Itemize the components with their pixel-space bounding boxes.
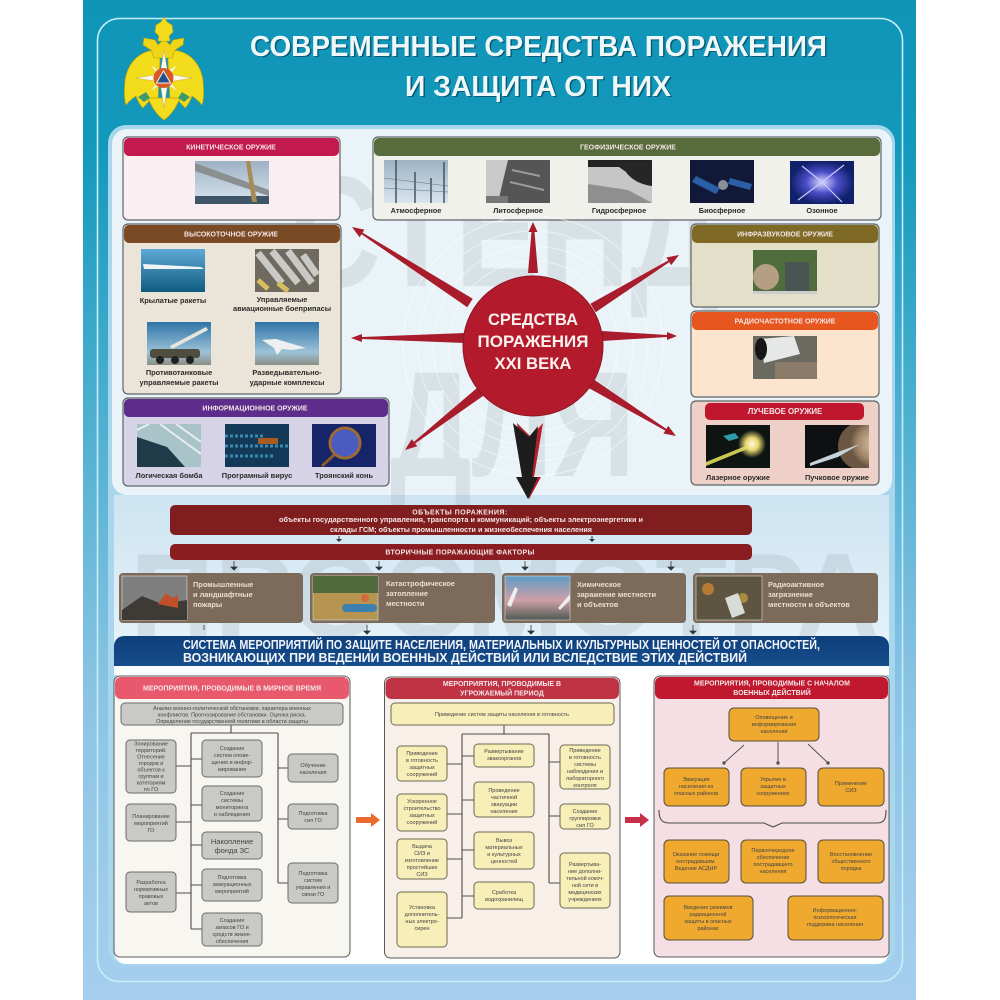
box: zoning: Зонирование [134,742,168,748]
banner: system of protection measures [114,636,889,666]
box: PPE issue: простейших [407,864,438,871]
box: accelerated construction: Ускоренное [407,799,437,805]
banner: objects of destruction: склады ГСМ; объекты промышленности и жизнеобеспечения населения [330,526,592,534]
box: radiation regimes: районах [697,925,719,932]
arrows: to secondary factors [336,536,595,542]
box: regulations: актов [144,901,158,907]
panel: information weapons: ИНФОРМАЦИОННОЕ ОРУЖИЕ [202,406,308,412]
photo: reconnaissance strike complex [255,322,319,365]
arrows: to protection system [204,625,696,634]
card: radioactive contamination: местности и объектов [768,600,850,609]
photo: logic bomb [137,424,201,467]
box: planning [126,804,176,841]
box: evacuation bodies [474,744,534,767]
box: medical network: ние дополни- [568,869,602,875]
box: medical network: учреждениях [568,897,602,903]
box: partial evacuation: частичной [491,794,517,801]
box: medical network [560,853,610,908]
watermark text: ДЛЯ [390,340,635,508]
panel: radio-frequency weapons [691,311,879,397]
box: rescue: Ведение АСДНР [675,866,717,872]
photo: biospheric [690,160,754,203]
captions [136,471,373,480]
banner: objects of destruction: объекты государственного управления, транспорта и коммуникаций; объекты электроэнергетики и [279,516,643,524]
box: public order: Восстановление [830,852,872,858]
box: lab control: контроля [573,783,597,789]
photo: chemical plumes [505,576,570,620]
title: И ЗАЩИТА ОТ НИХ [406,72,673,104]
box: zoning: городов и [139,761,163,767]
box: accelerated construction: сооружений [407,819,437,826]
card: radioactive contamination [693,573,878,623]
panel: kinetic weapons: КИНЕТИЧЕСКОЕ ОРУЖИЕ [186,144,276,152]
photo: hydrospheric [588,160,652,203]
box: removal of valuables: и культурных [487,852,521,858]
card: fires [119,573,303,623]
box: zoning: территорий. [136,747,167,754]
inner panel [108,125,895,965]
box: radiation regimes: Введение режимов [683,905,733,911]
brace [659,810,886,827]
box: PPE issue: СИЗ и [414,851,430,857]
banner: system of protection measures: ВОЗНИКАЮЩИХ ПРИ ВЕДЕНИИ ВОЕННЫХ ДЕЙСТВИЙ ИЛИ ВСЛЕДСТВИЕ ЭТИХ ДЕЙСТВИЙ [183,650,747,665]
watermark text: ПРОСМОТРА [130,528,880,664]
box: shelter fund: фонда ЗС [215,846,250,855]
box: accelerated construction [397,794,447,831]
panel: geophysical weapons [373,137,881,220]
captions: Атмосферное [391,206,441,215]
captions: Биосферное [699,206,745,215]
box: readiness: Приведение систем защиты населения в готовность [435,712,569,718]
box: control systems: управления и [296,885,330,891]
panel: threat-period measures [384,677,620,958]
box: medical network: ной сети в [572,882,598,889]
photo: trojan horse [312,424,376,467]
box: analysis: Анализ военно-политической обстановки, характера военных [153,705,311,712]
card: chemical contamination: Химическое [577,580,621,589]
card: fires: и ландшафтные [193,590,253,599]
box: regulations: нормативных [134,887,168,893]
box: evacuation: мероприятий [215,888,249,895]
box: additional power: ных электро- [405,919,439,925]
box: psychological support: психологическая [813,915,857,921]
title: СОВРЕМЕННЫЕ СРЕДСТВА ПОРАЖЕНИЯ [250,31,827,63]
captions [391,206,838,215]
box: monitoring [202,786,262,821]
box: primary support: обеспечение [757,855,789,861]
box: shelter: защитных [760,784,786,790]
captions: Разведывательно- [252,368,322,377]
concentric rings [403,216,663,476]
box: warning systems [202,740,262,777]
box: unit alert [474,882,534,909]
card: radioactive contamination: загрязнение [768,590,813,599]
box: evacuation [664,768,729,806]
arrow: peacetime to threat period [356,813,380,827]
banner: objects of destruction [170,505,752,535]
box: evacuation bodies: Развертывание [484,749,524,755]
box: additional power: сирен [415,926,429,932]
connector lines [176,725,288,929]
box: zoning: по ГО [144,787,159,793]
captions: ударные комплексы [250,378,324,387]
box: unit alert: Сработка [492,890,517,896]
box: planning: Планирование [132,814,170,820]
box: alerting: населения [760,729,788,735]
box: regulations: Разработка [136,880,167,886]
box: medical network: медицинских [568,890,602,896]
panel: threat-period measures: УГРОЖАЕМЫЙ ПЕРИОД [460,688,544,698]
box: training: Обучение [300,763,326,769]
photo: dosimeter and mushrooms [696,576,762,620]
box: radiation regimes: радиационной [690,911,726,918]
captions: Логическая бомба [136,471,203,480]
box: monitoring: и наблюдения [214,812,250,818]
panel: infrasound weapons [691,224,879,307]
box: evacuation: эвакуационных [212,882,252,888]
box: zoning: Отнесение [137,754,165,760]
photo: lithospheric [486,160,550,203]
panel: infrasound weapons: ИНФРАЗВУКОВОЕ ОРУЖИЕ [737,232,833,238]
box: lab control: наблюдения и [567,769,603,775]
box: additional power [397,892,447,947]
box: PPE issue: изготовление [405,858,439,864]
box: evacuation: Эвакуация [682,777,710,783]
box: psychological support: Информационно- [813,908,858,914]
captions: Гидросферное [592,206,646,215]
box: accelerated construction: защитных [409,813,435,819]
box: shelters readiness: защитных [409,765,435,771]
photo: software virus [225,424,289,467]
box: zones: Подготовка [299,811,328,817]
captions: Литосферное [493,206,543,215]
box: evacuation: населения из [679,784,714,790]
box: warning systems: систем опове- [214,753,250,759]
card: chemical contamination [502,573,686,623]
box: partial evacuation: населения [490,809,518,815]
photo: guided munitions [255,249,319,292]
box: zoning: объектов к [137,768,165,774]
panel: radio-frequency weapons: РАДИОЧАСТОТНОЕ ОРУЖИЕ [735,318,836,326]
box: evacuation: опасных районов [674,790,718,797]
box: alerting [729,708,819,741]
card: fires: Промышленные [193,580,253,589]
photo: radio-frequency emitter [753,336,817,379]
panel: peacetime measures: МЕРОПРИЯТИЯ, ПРОВОДИМЫЕ В МИРНОЕ ВРЕМЯ [143,686,321,692]
photo: atmospheric [384,160,448,203]
panel: beam weapons [691,401,886,485]
box: unit alert: водохранилищ [485,897,523,903]
box: evacuation bodies: эвакоорганов [487,756,521,762]
box: force grouping [560,804,610,829]
title [250,31,828,104]
box: lab control: системы [574,762,596,768]
box: removal of valuables [474,832,534,869]
card: flooding: местности [386,599,425,608]
photo: infrasound emitter [753,250,817,294]
captions: Противотанковые [146,368,212,377]
panel: high-precision weapons [123,224,341,394]
box: alerting: Оповещение и [755,715,793,721]
box: lab control: Приведение [569,748,601,754]
photo: ozone [790,161,854,204]
box: PPE issue [397,839,447,879]
box: shelter: сооружениях [756,791,790,797]
box: zoning: категориям [137,780,166,786]
box: force grouping: Создание [573,809,597,815]
card: flooding: Катастрофическое [386,579,455,588]
box: shelter: Укрытие в [760,777,786,783]
central circle: XXI ВЕКА [494,354,572,373]
box: removal of valuables: Вывоз [496,838,512,844]
box: monitoring: системы [221,798,243,804]
photo: particle-beam weapon [805,425,869,468]
captions: Управляемые [257,295,307,304]
box: regulations [126,872,176,912]
box: primary support: Первоочередное [751,848,795,854]
panel: kinetic weapons [123,137,340,220]
captions: управляемые ракеты [140,378,218,387]
banner: objects of destruction: ОБЪЕКТЫ ПОРАЖЕНИЯ: [412,510,508,516]
box: removal of valuables: ценностей [491,858,517,865]
panel: wartime measures: ВОЕННЫХ ДЕЙСТВИЙ [733,688,811,697]
card: flooding: затопление [386,589,428,598]
connector lines [447,725,560,918]
box: reserves [202,913,262,946]
title: И ЗАЩИТА ОТ НИХ [405,71,672,103]
panel: wartime measures: МЕРОПРИЯТИЯ, ПРОВОДИМЫЕ С НАЧАЛОМ [694,680,850,688]
box: additional power: Установка [409,905,436,911]
card: radioactive contamination: Радиоактивное [768,580,824,589]
banner: secondary factors [170,544,752,560]
outer frame line [98,18,902,982]
box: warning systems: мирования [218,767,246,773]
box: control systems: связи ГО [302,892,325,898]
box: planning: ГО [148,828,155,834]
panel: high-precision weapons: ВЫСОКОТОЧНОЕ ОРУЖИЕ [184,232,278,238]
box: psychological support: поддержка населения [807,922,863,928]
panel: peacetime measures [114,676,350,957]
box: shelter fund [202,832,262,859]
box: rescue: пострадавшим. [676,859,716,865]
card: flooding [310,573,495,623]
captions: Троянский конь [315,471,373,480]
central circle: СРЕДСТВА [488,310,578,329]
captions [706,473,869,482]
captions: Програмный вирус [222,471,292,480]
captions: Озонное [806,206,838,215]
captions: авиационные боеприпасы [233,304,331,313]
box: shelters readiness: сооружений [407,771,437,778]
arrows: alerting to actions [723,742,829,764]
box: planning: мероприятий [134,820,168,827]
box: alerting: информирование [752,722,796,728]
box: shelter fund: Накопление [211,837,253,846]
photo: flood [313,576,378,620]
box: lab control: в готовность [569,755,601,761]
box: shelters readiness: в готовность [406,758,438,764]
box: evacuation [202,869,262,901]
box: reserves: Создание [220,918,244,924]
box: shelter [741,768,806,806]
box: psychological support [788,896,883,940]
card: chemical contamination: и объектов [577,600,619,609]
box: radiation regimes [664,896,753,940]
box: analysis: Определение государственной политики в области защиты [156,718,308,725]
box: rescue: Оказание помощи [673,852,719,858]
photo: cruise missile [141,249,205,292]
watermark text: СТЕНД [290,144,720,320]
box: primary support [741,840,806,883]
box: control systems: систем [304,878,322,884]
box: zones [288,804,338,829]
box: reserves: обеспечения [216,939,248,945]
box: PPE: Применение [835,781,867,787]
box: force grouping: группировки [569,816,601,822]
box: medical network: Развертыва- [569,862,601,868]
captions [140,295,331,387]
banner: secondary factors: ВТОРИЧНЫЕ ПОРАЖАЮЩИЕ ФАКТОРЫ [385,550,535,556]
box: zoning: группам и [138,774,164,780]
photo: laser weapon [706,425,770,468]
box: rescue [664,840,729,883]
banner: system of protection measures: СИСТЕМА МЕРОПРИЯТИЙ ПО ЗАЩИТЕ НАСЕЛЕНИЯ, МАТЕРИАЛЬНЫХ И КУЛЬТУРНЫХ ЦЕННОСТЕЙ ОТ ОПАСНОСТЕЙ, [183,637,820,652]
box: primary support: пострадавшего [753,862,793,868]
box: reserves: средств жизне- [213,932,252,938]
card: fires: пожары [193,600,222,609]
captions: Крылатые ракеты [140,296,206,305]
box: reserves: запасов ГО и [215,925,249,931]
central circle: ПОРАЖЕНИЯ [478,332,588,351]
photo: fire [122,576,187,620]
arrow: threat period to wartime [625,813,649,827]
box: monitoring: мониторинга [216,805,249,811]
photo: kinetic gun [195,161,269,204]
box: public order: общественного [832,859,870,865]
box: accelerated construction: строительство [403,806,441,812]
photo: anti-tank missiles [147,322,211,365]
box: additional power: дополнитель- [405,912,440,918]
box: partial evacuation: эвакуации [491,802,517,808]
box: warning systems: щения и инфор- [211,760,253,766]
card: chemical contamination: заражение местности [577,590,657,599]
box: lab control [560,745,610,789]
box: zones: сил ГО [304,818,322,824]
box: medical network: тельной кокоч- [566,875,604,882]
box: control systems [288,863,338,903]
box: PPE issue: СИЗ [416,872,428,878]
box: removal of valuables: материальных [485,845,523,851]
box: readiness [391,703,614,725]
box: public order: порядка [841,866,862,872]
panel: beam weapons: ЛУЧЕВОЕ ОРУЖИЕ [748,407,822,416]
box: analysis [121,703,343,725]
box: force grouping: сил ГО [576,823,594,829]
box: lab control: лабораторного [566,776,604,782]
arrow: down to targets [513,423,543,499]
captions: Лазерное оружие [706,473,770,482]
box: radiation regimes: защиты в опасных [684,919,732,925]
box: monitoring: Создание [220,791,244,797]
title: СОВРЕМЕННЫЕ СРЕДСТВА ПОРАЖЕНИЯ [252,32,828,64]
box: shelters readiness [397,746,447,781]
box: PPE [818,768,884,806]
panel: threat-period measures: МЕРОПРИЯТИЯ, ПРОВОДИМЫЕ В [443,681,561,688]
panel: geophysical weapons: ГЕОФИЗИЧЕСКОЕ ОРУЖИЕ [580,144,676,152]
arrows: radiating from the center [351,222,679,450]
box: PPE: СИЗ [845,788,857,794]
box: shelters readiness: Приведение [406,751,438,757]
box: primary support: населения [759,869,787,875]
panel: wartime measures [654,676,889,957]
box: evacuation: Подготовка [218,875,247,881]
captions: Пучковое оружие [805,473,869,482]
box: partial evacuation [474,782,534,817]
box: public order [818,840,884,883]
box: control systems: Подготовка [299,871,328,877]
icon: emergency ministry emblem [124,17,204,120]
central circle [463,276,603,416]
box: analysis: конфликтов. Прогнозирование обстановки. Оценка риска. [158,712,307,718]
watermark text [130,144,880,664]
box: partial evacuation: Проведение [488,788,520,794]
box: training [288,754,338,782]
arrows: to factor cards [231,561,674,570]
box: zoning [126,740,176,793]
box: warning systems: Создание [220,746,244,752]
panel: information weapons [123,398,389,486]
box: regulations: правовых [139,894,164,900]
box: PPE issue: Выдача [412,844,433,850]
box: training: населения [299,770,327,776]
